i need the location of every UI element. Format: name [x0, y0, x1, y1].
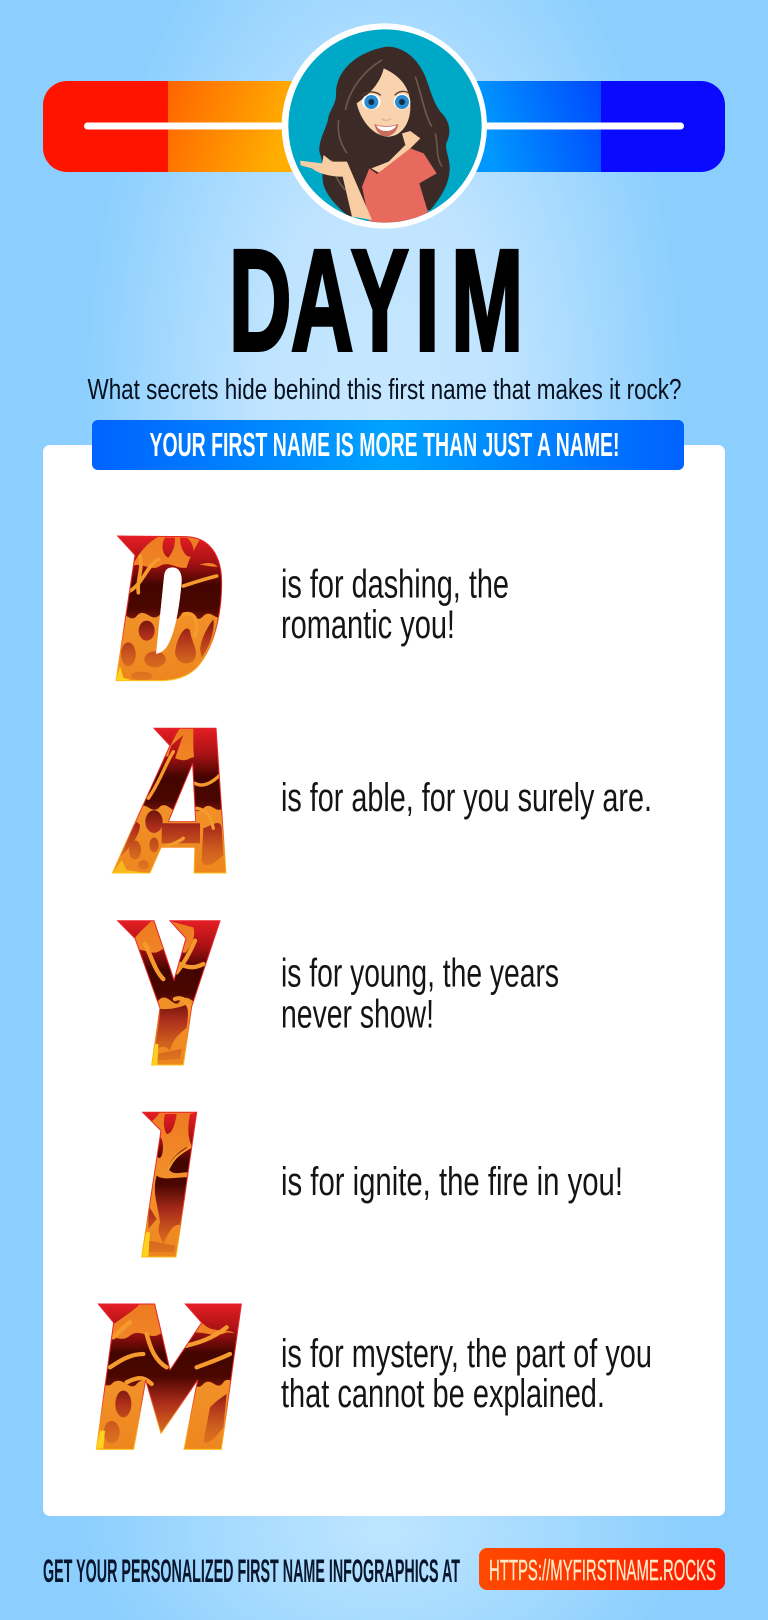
nose — [381, 118, 391, 120]
banner — [92, 420, 684, 470]
text for D — [281, 562, 509, 647]
left ribbon bar — [43, 81, 293, 172]
text for M — [281, 1332, 652, 1416]
neck and chest — [371, 131, 420, 173]
mouth — [374, 124, 398, 136]
url button — [479, 1548, 725, 1590]
fire letter A — [112, 728, 226, 874]
text for D: romantic you! — [281, 603, 455, 647]
arm and hand — [300, 155, 372, 220]
text for Y — [281, 952, 559, 1037]
face — [357, 68, 410, 137]
pink top — [362, 148, 437, 227]
text for D: is for dashing, the — [281, 562, 509, 606]
hair — [319, 47, 450, 217]
fire letter M — [93, 1302, 247, 1451]
title: DAYIM — [229, 221, 523, 382]
fire letter Y — [116, 920, 221, 1066]
text for M: that cannot be explained. — [281, 1372, 605, 1416]
text for I: is for ignite, the fire in you! — [281, 1160, 623, 1204]
white ribbon line — [84, 122, 684, 130]
avatar: cartoon woman in circle — [282, 23, 487, 229]
white content card — [43, 445, 725, 1516]
eyes — [361, 91, 410, 109]
fire letter D — [115, 536, 222, 682]
right ribbon bar — [475, 81, 725, 172]
fire letter I — [141, 1112, 198, 1258]
text for Y: never show! — [281, 993, 434, 1037]
text for Y: is for young, the years — [281, 952, 559, 996]
